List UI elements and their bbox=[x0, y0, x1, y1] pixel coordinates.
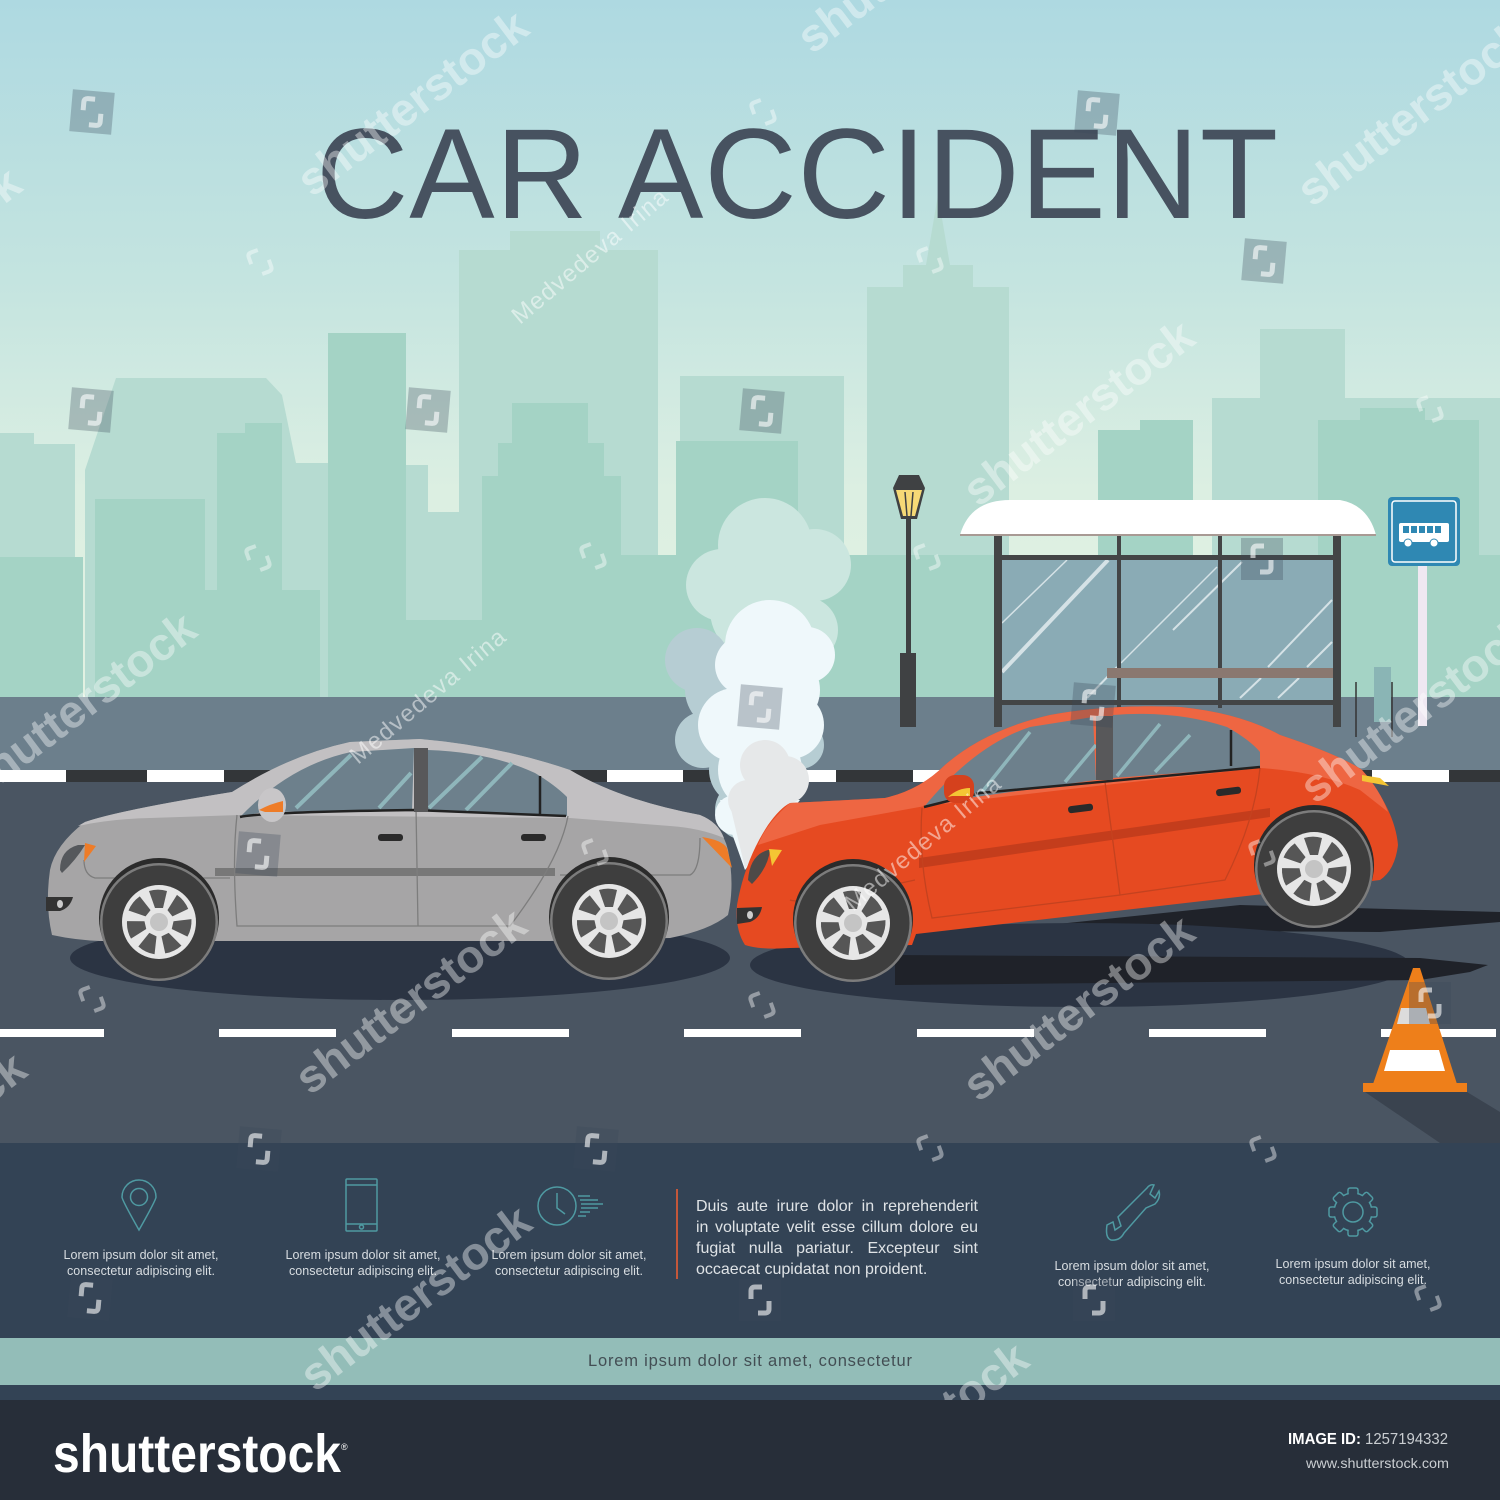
footer image id: IMAGE ID: 1257194332 bbox=[1288, 1431, 1448, 1448]
gray car headlight bbox=[60, 843, 96, 873]
caption: fast clock: consectetur adipiscing elit. bbox=[495, 1264, 643, 1278]
gray car bbox=[46, 739, 732, 981]
gray car tail light bbox=[702, 837, 732, 868]
red car door handles bbox=[1068, 786, 1241, 813]
caption: gear bbox=[1276, 1257, 1430, 1287]
road surface bbox=[0, 780, 1500, 1145]
teal caption band: Lorem ipsum dolor sit amet, consectetur bbox=[588, 1352, 912, 1370]
caption: map pin: consectetur adipiscing elit. bbox=[67, 1264, 215, 1278]
red car fog light bbox=[737, 907, 762, 924]
icon: fast clock bbox=[538, 1187, 603, 1225]
caption: smartphone: Lorem ipsum dolor sit amet, bbox=[286, 1248, 440, 1262]
watermark: shutterstock repeats: shutterstock bbox=[287, 0, 538, 206]
gray car front wheel bbox=[100, 863, 218, 981]
smoke cloud bbox=[665, 498, 851, 870]
road centre dashed line bbox=[0, 1029, 1496, 1037]
gray car upper highlight bbox=[78, 739, 724, 838]
gray car body bbox=[48, 739, 731, 941]
gray car mirror bbox=[258, 788, 286, 822]
gray car door seams bbox=[84, 808, 700, 926]
footer logo: shutterstock bbox=[53, 1424, 342, 1484]
curb with black and white blocks bbox=[0, 770, 1500, 782]
caption: fast clock bbox=[492, 1248, 646, 1278]
watermark: photographer name repeats: Medvedeva Irina bbox=[345, 623, 512, 770]
caption: wrench bbox=[1054, 1259, 1210, 1289]
info panel background bbox=[0, 1143, 1500, 1403]
icon: gear bbox=[1329, 1188, 1377, 1236]
red car rear wheel arch bbox=[1254, 805, 1374, 925]
paragraph text: Duis aute irure dolor in reprehenderit bbox=[696, 1198, 978, 1215]
icon: smartphone bbox=[346, 1179, 377, 1231]
red car front window bbox=[924, 717, 1096, 807]
red car headlight bbox=[748, 849, 782, 884]
icon: wrench bbox=[1106, 1185, 1160, 1240]
gray car shadow bbox=[70, 916, 730, 1000]
red car upper highlight bbox=[758, 706, 1388, 845]
caption: fast clock: Lorem ipsum dolor sit amet, bbox=[492, 1248, 646, 1262]
red car tail light bbox=[1362, 775, 1389, 786]
footer url: www.shutterstock.com bbox=[1305, 1455, 1449, 1471]
gray car front window bbox=[240, 748, 414, 817]
sky background bbox=[0, 0, 1500, 700]
caption: gear: consectetur adipiscing elit. bbox=[1279, 1273, 1427, 1287]
gray car rear wheel arch bbox=[549, 857, 669, 977]
footer bar bbox=[0, 1400, 1500, 1500]
gray car door handles bbox=[378, 834, 546, 841]
icon: map pin bbox=[122, 1180, 156, 1230]
paragraph text: in voluptate velit esse cillum dolore eu bbox=[696, 1219, 978, 1236]
caption: gear: Lorem ipsum dolor sit amet, bbox=[1276, 1257, 1430, 1271]
title: CAR ACCIDENT bbox=[316, 103, 1278, 246]
red car side moulding bbox=[919, 808, 1270, 868]
gray car glass reflections bbox=[296, 755, 512, 810]
watermark: shutterstock repeats: shutterstock bbox=[953, 904, 1204, 1111]
paragraph text: fugiat nulla pariatur. Excepteur sint bbox=[696, 1240, 978, 1257]
caption: wrench: consectetur adipiscing elit. bbox=[1058, 1275, 1206, 1289]
red car front wheel arch bbox=[793, 859, 913, 979]
caption: map pin: Lorem ipsum dolor sit amet, bbox=[64, 1248, 218, 1262]
red car body bbox=[737, 706, 1398, 949]
gray car side moulding bbox=[215, 868, 555, 876]
red car front wheel bbox=[794, 864, 912, 982]
caption: wrench: Lorem ipsum dolor sit amet, bbox=[1054, 1259, 1210, 1273]
watermark: shutterstock repeats: shutterstock bbox=[285, 897, 536, 1104]
red car glass reflections bbox=[982, 724, 1190, 792]
teal caption band bbox=[0, 1338, 1500, 1385]
watermark: photographer name repeats: Medvedeva Irina bbox=[840, 770, 1007, 917]
watermark: photographer name repeats: Medvedeva Irina bbox=[507, 183, 674, 330]
red car bbox=[737, 706, 1398, 982]
bus shelter bbox=[960, 500, 1376, 727]
litter bin bbox=[1356, 667, 1392, 737]
gray car rear wheel bbox=[550, 862, 668, 980]
pavement bbox=[0, 697, 1500, 772]
caption: smartphone: consectetur adipiscing elit. bbox=[289, 1264, 437, 1278]
watermark: logo marks bbox=[67, 89, 1451, 1321]
gray car front wheel arch bbox=[99, 858, 219, 978]
red car rear window bbox=[1113, 714, 1260, 778]
footer registered mark: ® bbox=[341, 1442, 348, 1452]
gray car pillars and sills bbox=[240, 776, 566, 817]
paragraph text bbox=[696, 1198, 978, 1278]
street lamp bbox=[893, 475, 925, 727]
caption: map pin bbox=[64, 1248, 218, 1278]
red car shadows bbox=[750, 905, 1500, 1007]
paragraph text: occaecat cupidatat non proident. bbox=[696, 1261, 927, 1278]
caption: smartphone bbox=[286, 1248, 440, 1278]
watermark: shutterstock repeats: shutterstock bbox=[953, 309, 1204, 516]
watermark: photographer name repeats bbox=[345, 183, 1007, 917]
city skyline: back layer bbox=[0, 195, 1500, 700]
red car mirror bbox=[944, 775, 974, 803]
gray car fog light bbox=[46, 897, 73, 911]
watermark: shutterstock repeats: shutterstock bbox=[290, 1194, 541, 1401]
gray car rear window bbox=[427, 750, 567, 816]
red car rear wheel bbox=[1255, 810, 1373, 928]
city skyline: front layer bbox=[0, 333, 1500, 700]
red car pillars and sills bbox=[924, 730, 1260, 807]
traffic cone bbox=[1363, 968, 1500, 1143]
red car door seams bbox=[790, 768, 1260, 918]
bus stop sign bbox=[1388, 497, 1460, 726]
paragraph accent rule bbox=[676, 1189, 678, 1279]
